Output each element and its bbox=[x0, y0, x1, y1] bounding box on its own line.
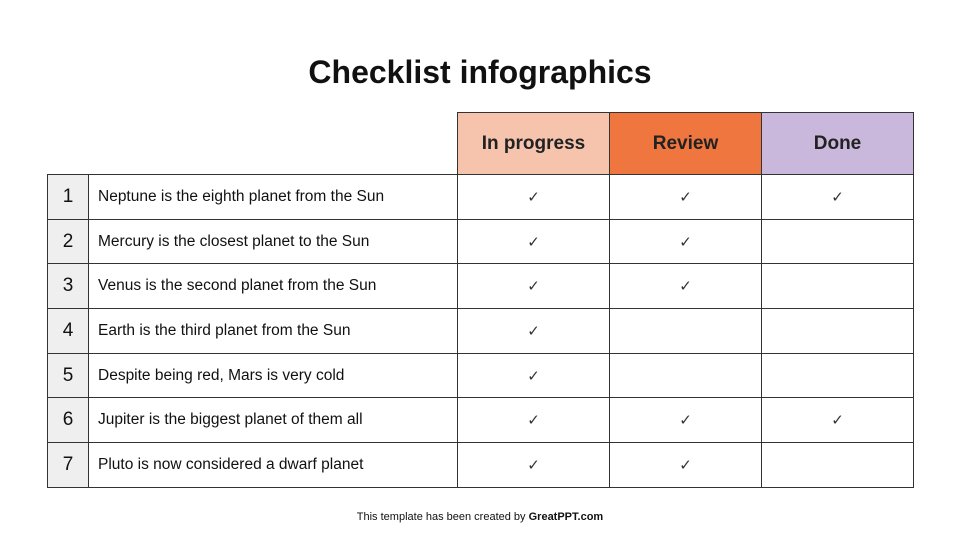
checklist table: ✓ bbox=[679, 189, 692, 206]
footer credit: GreatPPT.com bbox=[529, 511, 603, 523]
checklist table: ✓ bbox=[679, 234, 692, 251]
checklist table: ✓ bbox=[831, 189, 844, 206]
title: Checklist infographics bbox=[308, 54, 652, 90]
checklist table: ✓ bbox=[527, 457, 540, 474]
checklist table: ✓ bbox=[527, 189, 540, 206]
checklist table: Neptune is the eighth planet from the Sun bbox=[98, 188, 384, 205]
checklist table: 1 bbox=[63, 186, 73, 207]
checklist table: 7 bbox=[63, 454, 73, 475]
checklist table: ✓ bbox=[527, 234, 540, 251]
checklist table: ✓ bbox=[831, 412, 844, 429]
checklist table: ✓ bbox=[527, 278, 540, 295]
checklist table: ✓ bbox=[527, 323, 540, 340]
checklist table: ✓ bbox=[679, 278, 692, 295]
checklist table: Venus is the second planet from the Sun bbox=[98, 277, 376, 294]
checklist table: ✓ bbox=[679, 457, 692, 474]
checklist table: ✓ bbox=[527, 412, 540, 429]
checklist table: Jupiter is the biggest planet of them all bbox=[98, 411, 363, 428]
checklist table: Earth is the third planet from the Sun bbox=[98, 322, 350, 339]
footer credit bbox=[357, 511, 603, 523]
checklist table: 2 bbox=[63, 231, 73, 252]
checklist table: 3 bbox=[63, 275, 73, 296]
checklist table: 6 bbox=[63, 409, 73, 430]
checklist table: Review bbox=[653, 132, 718, 154]
checklist table: In progress bbox=[482, 132, 585, 154]
checklist table: Done bbox=[814, 132, 861, 154]
checklist table: 5 bbox=[63, 365, 73, 386]
checklist table: ✓ bbox=[679, 412, 692, 429]
checklist table: 4 bbox=[63, 320, 73, 341]
checklist table: Despite being red, Mars is very cold bbox=[98, 367, 344, 384]
checklist table: Pluto is now considered a dwarf planet bbox=[98, 456, 363, 473]
checklist table: ✓ bbox=[527, 368, 540, 385]
footer credit: This template has been created by bbox=[357, 511, 526, 523]
checklist table bbox=[47, 112, 914, 488]
checklist table: Mercury is the closest planet to the Sun bbox=[98, 233, 369, 250]
